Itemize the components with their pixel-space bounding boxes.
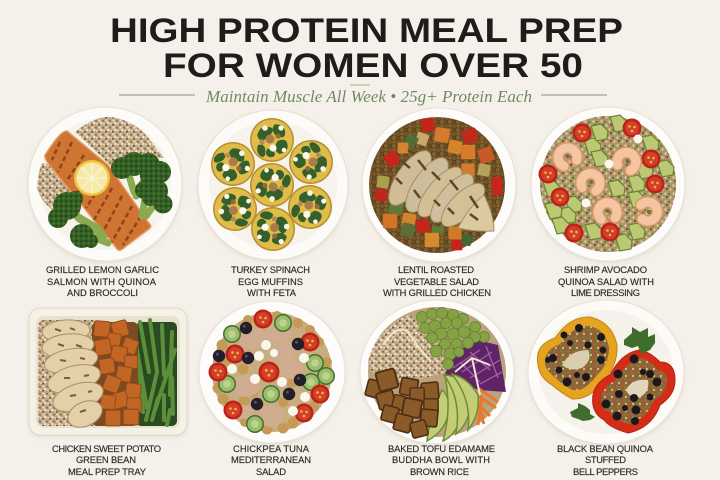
- cucumbers: [218, 314, 335, 433]
- label: meal 7: BAKED TOFU EDAMAME: [388, 443, 495, 454]
- label: meal 2: [231, 264, 310, 298]
- tahini drizzle: [383, 329, 490, 395]
- label: meal 7: BUDDHA BOWL WITH: [392, 454, 490, 465]
- bowl: [360, 300, 514, 446]
- label: meal 4: LIME DRESSING: [571, 287, 640, 298]
- meal 4: shrimp avocado quinoa plate: [531, 107, 685, 263]
- label: meal 3: [383, 264, 491, 298]
- label: meal 5: CHICKEN SWEET POTATO: [52, 443, 161, 454]
- lentils: [369, 117, 505, 253]
- label: meal 3: WITH GRILLED CHICKEN: [383, 287, 491, 298]
- feta: [227, 340, 310, 416]
- title: FOR WOMEN OVER 50: [163, 47, 583, 85]
- baked tofu: [365, 368, 439, 439]
- salmon fillet: [45, 131, 151, 250]
- meal 6: chickpea tuna salad: [199, 301, 345, 445]
- meal 3: lentil salad plate: [362, 108, 516, 264]
- meal 1: salmon plate: [28, 107, 182, 263]
- bowl: [531, 107, 685, 263]
- title: HIGH PROTEIN MEAL PREP: [110, 12, 623, 50]
- roasted vegetables: [374, 117, 502, 250]
- label: meal 1: [46, 264, 159, 298]
- egg muffins: [205, 118, 341, 257]
- label: meal 8: [557, 443, 654, 477]
- olives: [213, 322, 306, 410]
- bowl: [362, 108, 516, 264]
- avocado slices: [427, 374, 478, 441]
- green bean backing and beans: [133, 320, 177, 426]
- meal 2: egg muffins plate: [198, 110, 348, 262]
- label: meal 4: SHRIMP AVOCADO: [564, 264, 647, 275]
- label: meal 4: QUINOA SALAD WITH: [558, 276, 654, 287]
- tray: [29, 308, 187, 437]
- feta: [582, 134, 642, 208]
- lemon slice: [74, 160, 110, 196]
- label: meal 8: BELL PEPPERS: [573, 466, 638, 477]
- sliced grilled chicken: [381, 144, 494, 233]
- plate: [198, 110, 348, 262]
- carrots: [470, 388, 498, 425]
- avocado cubes: [543, 115, 674, 251]
- bowl: [199, 301, 345, 445]
- cilantro bottom: [570, 403, 595, 421]
- plate: [528, 300, 684, 446]
- label: meal 3: LENTIL ROASTED: [398, 264, 474, 275]
- tomatoes: [208, 310, 330, 422]
- label: meal 4: [558, 264, 654, 298]
- label: meal 5: GREEN BEAN: [76, 454, 136, 465]
- yellow pepper: [537, 317, 617, 399]
- brown rice: [368, 314, 446, 385]
- label: meal 2: WITH FETA: [247, 287, 297, 298]
- label: meal 5: [52, 443, 161, 477]
- tuna: [232, 324, 303, 427]
- quinoa: [38, 320, 98, 426]
- label: meal 7: [388, 443, 495, 477]
- label: meal 2: TURKEY SPINACH: [231, 264, 310, 275]
- label: meal 6: CHICKPEA TUNA: [233, 443, 310, 454]
- plate: [28, 107, 182, 263]
- chickpeas: [212, 311, 332, 434]
- red pepper: [593, 350, 675, 433]
- meal 5: chicken sweet potato tray: [29, 308, 187, 437]
- label: meal 6: SALAD: [256, 466, 286, 477]
- meal 7: tofu buddha bowl: [360, 300, 514, 446]
- quinoa: [37, 117, 164, 213]
- label: meal 8: STUFFED: [585, 454, 626, 465]
- title: [110, 12, 623, 85]
- sliced chicken: [41, 319, 107, 432]
- quinoa base: [540, 116, 676, 252]
- label: meal 6: [231, 443, 311, 477]
- label: meal 1: AND BROCCOLI: [67, 287, 138, 298]
- bowl food base: [368, 307, 506, 437]
- sweet potato cubes: [92, 319, 141, 426]
- cilantro top: [624, 327, 655, 354]
- label: meal 1: SALMON WITH QUINOA: [47, 276, 157, 287]
- label: meal 3: VEGETABLE SALAD: [394, 276, 479, 287]
- red cabbage: [445, 340, 506, 392]
- meal 8: stuffed bell peppers: [528, 300, 684, 446]
- broccoli: [48, 152, 172, 248]
- subtitle with rules: Maintain Muscle All Week • 25g+ Protein Each: [205, 87, 532, 106]
- label: meal 6: MEDITERRANEAN: [231, 454, 311, 465]
- label: meal 7: BROWN RICE: [410, 466, 469, 477]
- shrimp: [555, 144, 659, 222]
- tomatoes: [538, 118, 664, 242]
- label: meal 5: MEAL PREP TRAY: [68, 466, 147, 477]
- label: meal 8: BLACK BEAN QUINOA: [557, 443, 654, 454]
- edamame: [416, 308, 490, 370]
- label: meal 1: GRILLED LEMON GARLIC: [46, 264, 159, 275]
- label: meal 2: EGG MUFFINS: [238, 276, 303, 287]
